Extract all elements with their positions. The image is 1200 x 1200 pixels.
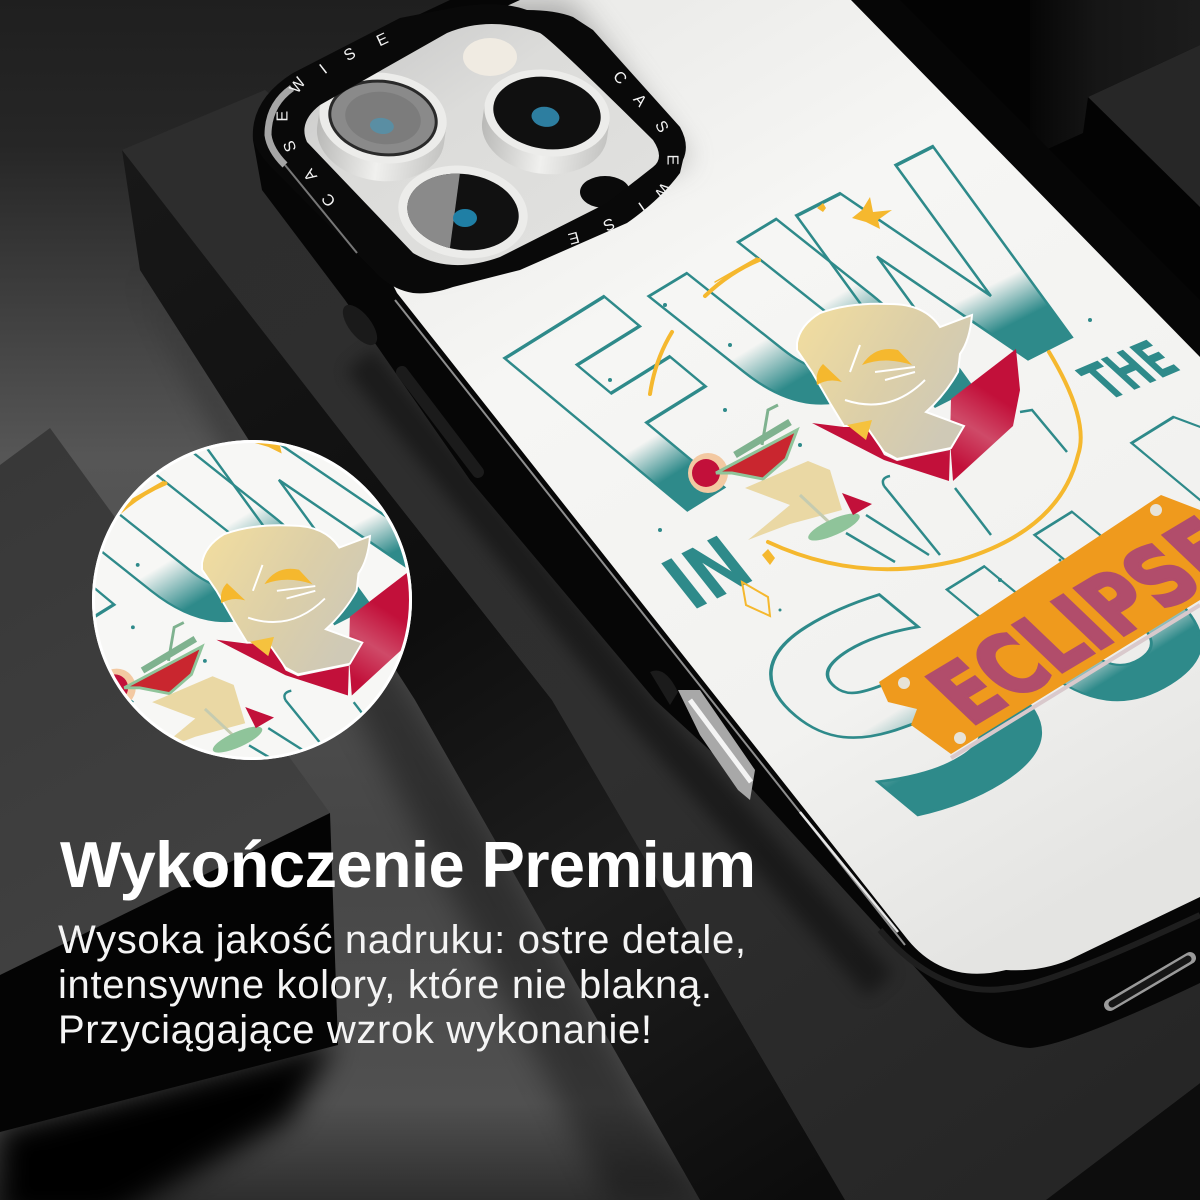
body text: intensywne kolory, które nie blakną. xyxy=(58,963,712,1007)
cocktail and hand xyxy=(688,405,872,546)
paint specks xyxy=(608,303,1092,612)
flash xyxy=(463,38,517,76)
microphone hole xyxy=(580,176,630,208)
yellow ring xyxy=(650,258,1081,569)
shadow around camera island xyxy=(508,0,697,186)
circular magnified detail xyxy=(92,440,412,760)
charging port xyxy=(1110,958,1190,1005)
word FUN: F xyxy=(437,245,862,571)
body text xyxy=(58,918,746,1052)
stars xyxy=(742,197,892,616)
word IN: IN xyxy=(647,521,769,626)
body text: Wysoka jakość nadruku: ostre detale, xyxy=(58,918,746,962)
camera bumper ring xyxy=(253,4,686,293)
side button: volume xyxy=(402,372,478,472)
lower left block xyxy=(0,428,338,1200)
vampire cape xyxy=(812,349,1020,481)
heading: Wykończenie Premium xyxy=(60,828,756,901)
word FUN xyxy=(437,85,1136,571)
brand text CASEWISE left: CASEWISE xyxy=(275,30,391,209)
vampire head xyxy=(797,304,972,459)
silver case edge xyxy=(268,88,357,253)
camera island xyxy=(253,4,686,293)
lens one xyxy=(311,65,453,189)
phone case body xyxy=(253,0,1200,1048)
body text: Przyciągające wzrok wykonanie! xyxy=(58,1008,652,1052)
camera glass xyxy=(298,19,666,272)
word THE: THE xyxy=(1066,331,1195,412)
word FUN: U xyxy=(587,174,1007,476)
lens two xyxy=(476,62,615,182)
word SUN xyxy=(769,416,1200,816)
eclipse plank xyxy=(879,495,1200,758)
thin teal strokes xyxy=(846,410,1067,562)
side button: silver xyxy=(650,671,755,800)
phone white back xyxy=(300,0,1200,974)
lens three xyxy=(398,166,528,258)
side button: mute xyxy=(337,299,383,351)
printed artwork xyxy=(502,144,1200,816)
brand text CASEWISE right: CASEWISE xyxy=(566,68,681,247)
word FUN: N xyxy=(739,85,1136,478)
word SUN: S xyxy=(674,530,1147,885)
upper right dark area xyxy=(800,0,1200,600)
